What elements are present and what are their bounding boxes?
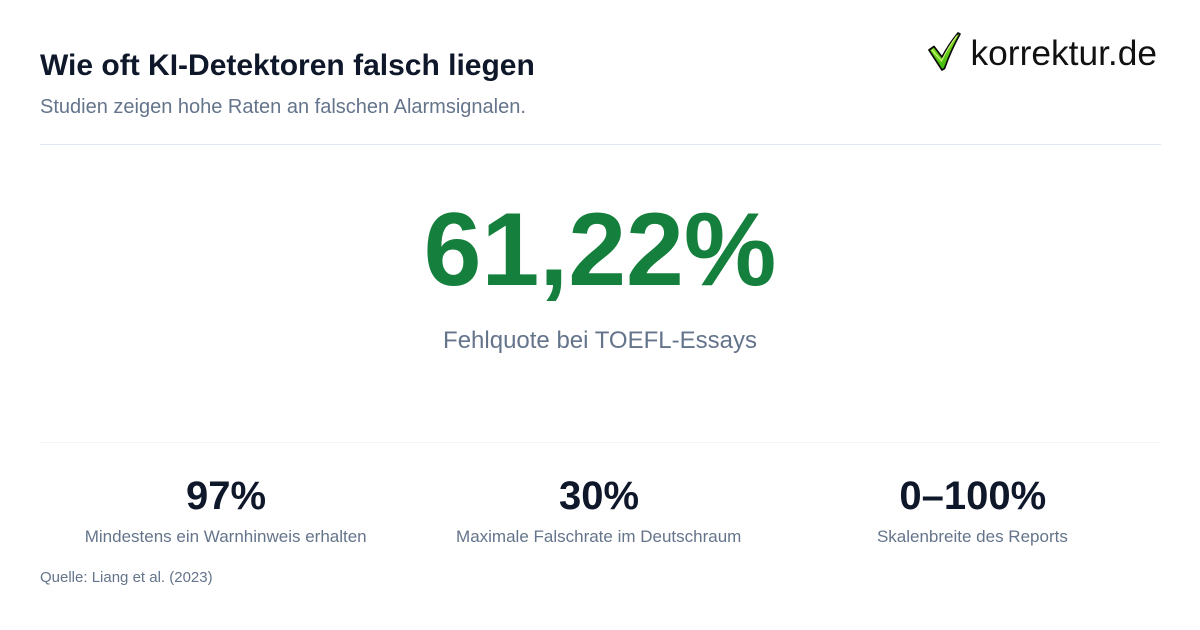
stat value: 0–100% (899, 474, 1046, 518)
logo wordmark: korrektur.de (970, 34, 1157, 73)
main figure: 61,22%: 61,22% (424, 192, 776, 308)
stat: 0–100% (877, 474, 1068, 546)
source note: Quelle: Liang et al. (2023) (40, 569, 213, 586)
stat label: Maximale Falschrate im Deutschraum (456, 526, 741, 546)
stat: 97% (85, 474, 367, 546)
header divider (40, 144, 1161, 145)
stats divider (40, 442, 1161, 443)
main figure caption: Fehlquote bei TOEFL-Essays (443, 327, 757, 354)
stat value: 97% (186, 474, 266, 518)
stat: 30% (456, 474, 741, 546)
stat value: 30% (559, 474, 639, 518)
logo: korrektur.de (928, 32, 1157, 73)
subtitle: Studien zeigen hohe Raten an falschen Alarmsignalen. (40, 96, 526, 118)
icon: green check mark (929, 33, 960, 70)
stat label: Mindestens ein Warnhinweis erhalten (85, 526, 367, 546)
stat label: Skalenbreite des Reports (877, 526, 1068, 546)
title: Wie oft KI-Detektoren falsch liegen (40, 49, 535, 82)
